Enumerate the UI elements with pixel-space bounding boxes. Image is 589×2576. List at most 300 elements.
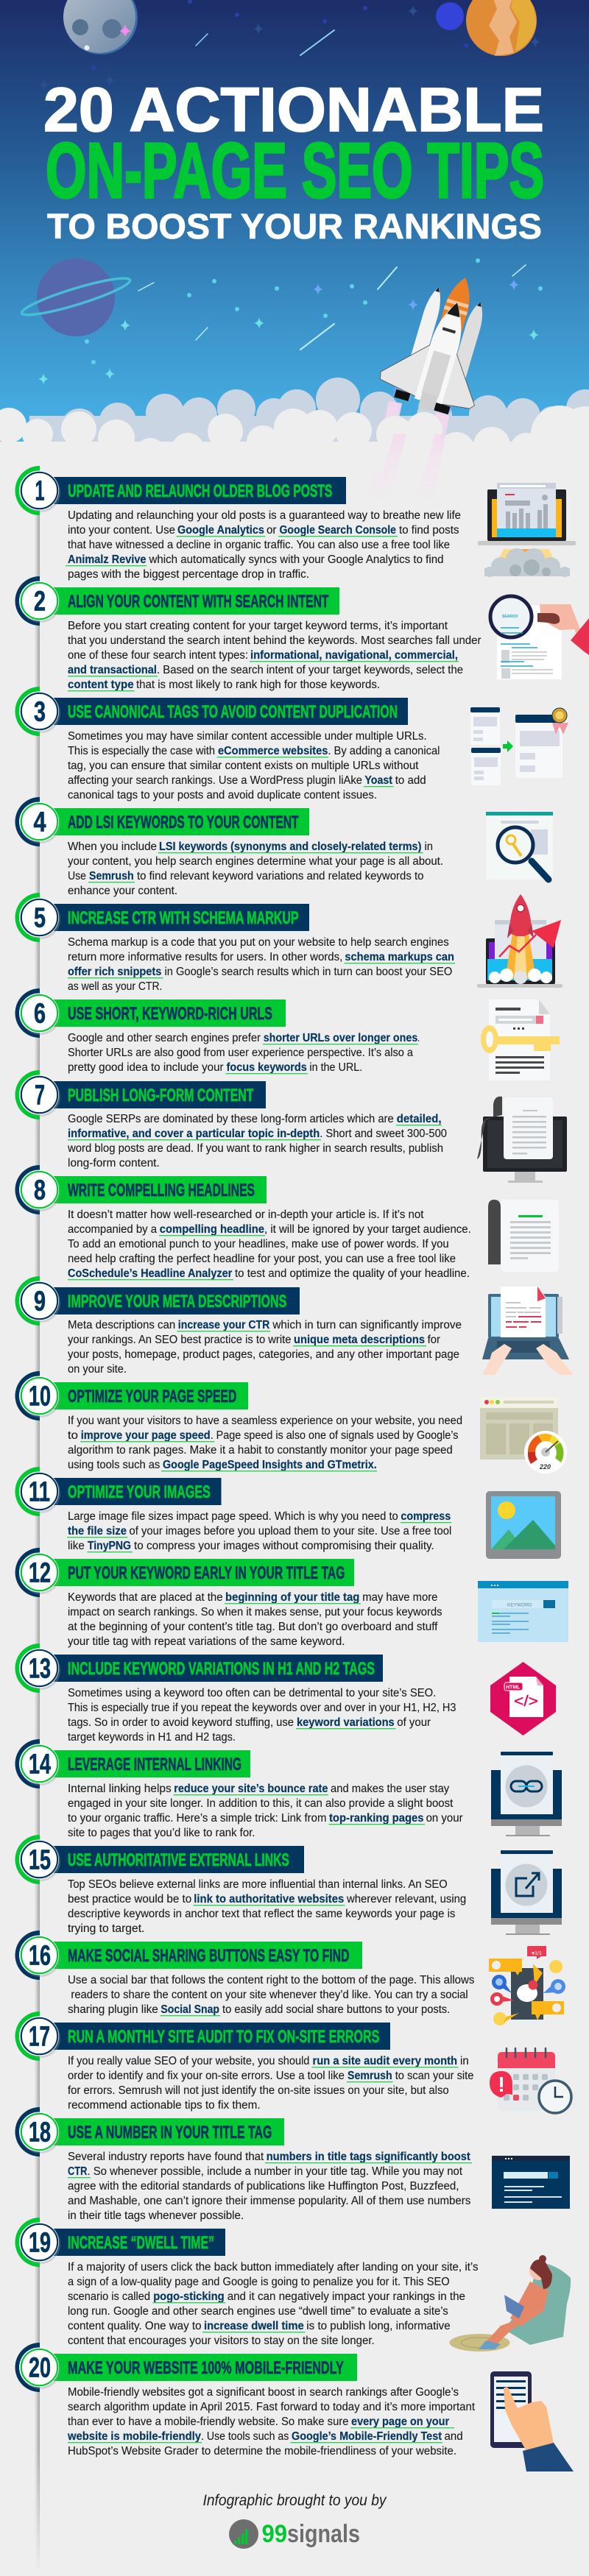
tip 20 (15, 2343, 574, 2471)
body text 10: . Page speed is also one of signals used by Google’s (211, 1429, 459, 1442)
icon: social phone with bubbles (489, 1946, 565, 2026)
body text 18: numbers in title tags significantly boost (267, 2151, 470, 2163)
body text 10: Google PageSpeed Insights and GTmetrix. (163, 1459, 377, 1471)
body text 14: Internal linking helps (68, 1783, 172, 1795)
body text 1: that have witnessed a decline in organic traffic. You can also use a free tool like (68, 539, 450, 551)
body text 12 (68, 1591, 442, 1648)
heading bar 13 (52, 1655, 383, 1682)
body text 3: This is especially the case with (68, 745, 215, 757)
body text 18 (68, 2151, 472, 2222)
body text 18: and Mashable, one can’t ignore their immense popularity. All of them use numbers (68, 2195, 471, 2207)
body text 15: link to authoritative websites (194, 1893, 344, 1906)
body text 2: . Based on the search intent of your target keywords, select the (157, 664, 463, 676)
heading bar 19 (52, 2229, 225, 2256)
body text 16: readers to share the content on your site whenever they’d like. You can try a social (71, 1989, 468, 2001)
body text 10: to (68, 1429, 78, 1442)
body text 20: than ever to have a mobile-friendly website. So make sure (68, 2416, 349, 2428)
body text 13: Sometimes using a keyword too often can be detrimental to your site’s SEO. (68, 1687, 436, 1699)
body text 1: into your content. Use (68, 524, 175, 537)
heading bar 9: IMPROVE YOUR META DESCRIPTIONS (68, 1292, 286, 1312)
body text 9: your posts, homepage, product pages, categories, and any other important page (68, 1348, 459, 1361)
number badge 2 (15, 576, 60, 626)
body text 16: Use a social bar that follows the content right to the bottom of the page. This allows (68, 1974, 475, 1986)
icon: HTML file hexagon: </> (514, 1694, 538, 1710)
body text 3: to add (395, 774, 426, 787)
body text 10 (68, 1415, 462, 1471)
body text 3: Yoast (364, 774, 392, 787)
body text 14 (68, 1783, 463, 1839)
body text 12: Keywords that are placed at the (68, 1591, 223, 1604)
body text 11: of your images before you upload them to your site. Use a free tool (130, 1525, 451, 1538)
body text 2: and transactional (68, 664, 157, 676)
heading bar 17: RUN A MONTHLY SITE AUDIT TO FIX ON-SITE ERRORS (68, 2027, 379, 2047)
title: TO BOOST YOUR RANKINGS (47, 208, 542, 247)
body text 2 (68, 620, 482, 691)
icon: browser with speedometer (480, 1397, 567, 1473)
icon: magnifier over key (486, 812, 553, 880)
body text 7: . Short and sweet 300-500 (320, 1128, 447, 1140)
heading bar 9 (52, 1287, 300, 1314)
body text 8: to test and optimize the quality of your headline. (235, 1267, 470, 1280)
body text 4: in (424, 841, 433, 853)
tip 5 (15, 893, 562, 993)
number badge 1 (15, 466, 60, 515)
body text 20: search algorithm update in April 2015. Fast forward to today and it’s more important (68, 2401, 476, 2413)
body text 17: order to identify and fix your on-site errors. Use a tool like (68, 2070, 345, 2082)
heading bar 18 (52, 2118, 284, 2145)
sparkles (38, 5, 540, 385)
icon: key over document (481, 999, 560, 1080)
number badge 1: 1 (35, 475, 44, 506)
credit line: Infographic brought to you by (203, 2492, 387, 2509)
body text 2: one of these four search intent types: (68, 649, 248, 662)
number badge 18: 18 (29, 2117, 51, 2148)
rocket (374, 262, 508, 422)
body text 7 (67, 1113, 447, 1170)
number badge 5 (15, 893, 60, 942)
body text 19: content quality. One way to (68, 2320, 202, 2332)
body text 14: top-ranking pages (329, 1812, 424, 1825)
body text 9: for (428, 1334, 440, 1346)
body text 14: to your organic traffic. Here’s a simple trick: Link from (68, 1812, 326, 1825)
icon: HTML file hexagon: HTML (506, 1685, 521, 1690)
body text 2: content type (68, 679, 134, 691)
body text 20: website is mobile-friendly (67, 2430, 201, 2443)
body text 7: Google SERPs are dominated by these long-form articles which are (68, 1113, 394, 1125)
body text 18: . So whenever possible, include a number in your title tag. While you may not (87, 2165, 463, 2178)
number badge 12: 12 (29, 1557, 51, 1588)
body text 5: return more informative results for users. In other words, (68, 951, 342, 963)
heading bar 2: ALIGN YOUR CONTENT WITH SEARCH INTENT (68, 592, 329, 612)
number badge 14 (15, 1739, 60, 1788)
clouds: back layer (26, 378, 589, 453)
number badge 9: 9 (34, 1287, 46, 1317)
number badge 10 (15, 1371, 60, 1420)
tip 1 (15, 466, 576, 581)
heading bar 5 (52, 904, 309, 931)
icon: duplicate pages and canonical page (470, 707, 568, 785)
body text 1 (66, 509, 461, 581)
number badge 19: 19 (29, 2227, 51, 2258)
shooting stars (138, 30, 526, 350)
body text 8: , it will be ignored by your target audience. (264, 1223, 471, 1236)
body text 1: pages with the biggest percentage drop in traffic. (68, 568, 309, 581)
body text 4 (68, 841, 443, 897)
body text 18: Several industry reports have found that (68, 2151, 264, 2163)
body text 15: trying to target. (68, 1922, 144, 1935)
body text 7: word blog posts are dead. If you want to rank higher in search results, publish (67, 1142, 443, 1155)
body text 2: that is most likely to rank high for those keywords. (136, 679, 380, 691)
tip 7 (15, 1070, 567, 1183)
heading bar 6: USE SHORT, KEYWORD-RICH URLS (68, 1004, 272, 1024)
number badge 8 (15, 1165, 60, 1214)
icon: search results window: KEYWORD (507, 1603, 532, 1607)
heading bar 2 (52, 587, 339, 615)
body text 7: long-form content. (68, 1157, 160, 1170)
heading bar 5: INCREASE CTR WITH SCHEMA MARKUP (68, 908, 299, 928)
body text 17: recommend actionable tips to fix them. (68, 2099, 261, 2112)
body text 11 (67, 1510, 451, 1552)
body text 18: agree with the editorial standards of publications like Huffington Post, Buzzfeed, (68, 2180, 459, 2193)
icon: calendar and clock (490, 2048, 571, 2113)
heading bar 20 (52, 2354, 357, 2381)
body text 8: CoSchedule’s Headline Analyzer (68, 1267, 232, 1280)
body text 12: beginning of your title tag (225, 1591, 359, 1604)
tip 18 (15, 2107, 570, 2222)
number badge 7: 7 (35, 1080, 45, 1111)
body text 19: pogo-sticking (153, 2290, 225, 2303)
icon: social phone with bubbles: ♥1/1 (532, 1951, 542, 1956)
body text 1: Google Search Console (280, 524, 396, 537)
logo: 99signals (229, 2519, 360, 2549)
body text 16: sharing plugin like (68, 2003, 158, 2016)
heading bar 11 (52, 1478, 221, 1505)
body text 2: that you understand the search intent behind the keywords. Most searches fall under (68, 634, 482, 647)
body text 3 (68, 730, 440, 802)
heading bar 10: OPTIMIZE YOUR PAGE SPEED (68, 1387, 236, 1406)
number badge 14: 14 (29, 1749, 51, 1780)
body text 9: Meta descriptions can (68, 1319, 175, 1331)
hero: space scene (0, 0, 589, 500)
number badge 3 (15, 687, 60, 736)
number badge 17 (15, 2011, 60, 2061)
body text 10: If you want your visitors to have a seamless experience on your website, you need (68, 1415, 462, 1427)
body text 4: When you include (68, 841, 157, 853)
icon: magnifier over search page: SEARCH (502, 615, 518, 619)
body text 19: If a majority of users click the back button immediately after landing on your site, it’s (68, 2261, 479, 2274)
heading bar 1 (52, 477, 346, 504)
body text 4: enhance your content. (68, 885, 177, 897)
body text 10: improve your page speed (81, 1429, 211, 1442)
tip 15 (15, 1835, 562, 1935)
title: 20 ACTIONABLE (43, 75, 544, 144)
body text 5 (68, 936, 455, 993)
icon: hands typing on laptop (482, 1287, 574, 1375)
number badge 15: 15 (29, 1844, 51, 1875)
body text 19: long run. Google and other search engines use “dwell time” to evaluate a site’s (68, 2305, 448, 2318)
number badge 16: 16 (29, 1940, 51, 1971)
number badge 15 (15, 1835, 60, 1884)
body text 9 (68, 1319, 462, 1376)
heading bar 4: ADD LSI KEYWORDS TO YOUR CONTENT (68, 813, 299, 832)
planet: ringed purple (19, 258, 133, 336)
body text 4: LSI keywords (synonyms and closely-related terms) (159, 841, 421, 853)
number badge 20 (15, 2343, 60, 2392)
body text 13: tags. So in order to avoid keyword stuffing, use (68, 1716, 294, 1729)
footer credit (203, 2492, 387, 2549)
heading bar 7 (52, 1081, 266, 1108)
body text 5: in Google’s search results which in turn can boost your SEO (165, 966, 452, 978)
tip 2 (15, 576, 589, 691)
icon: headline document (488, 1200, 559, 1272)
body text 14: reduce your site’s bounce rate (174, 1783, 328, 1795)
logo: 99signals: 99 (262, 2520, 287, 2548)
clouds: front layer (0, 406, 589, 471)
body text 19: is to publish long, informative (306, 2320, 451, 2332)
body text 14: site to pages that you’d like to rank for. (68, 1827, 255, 1839)
number badge 4 (15, 797, 60, 846)
body text 3: Sometimes you may have similar content accessible under multiple URLs. (68, 730, 427, 743)
body text 6: shorter URLs over longer ones (264, 1032, 417, 1044)
heading bar 13: INCLUDE KEYWORD VARIATIONS IN H1 AND H2 TAGS (68, 1659, 375, 1679)
body text 6: in the URL. (309, 1061, 362, 1074)
heading bar 20: MAKE YOUR WEBSITE 100% MOBILE-FRIENDLY (68, 2358, 344, 2378)
body text 19: scenario is called (68, 2290, 150, 2303)
number badge 5: 5 (34, 902, 46, 933)
tip 8 (15, 1165, 559, 1280)
body text 6 (68, 1032, 420, 1074)
body text 5: offer rich snippets (68, 966, 161, 978)
body text 11: TinyPNG (88, 1540, 131, 1552)
number badge 20: 20 (29, 2352, 51, 2383)
body text 1: Google Analytics (177, 524, 264, 537)
body text 2: informational, navigational, commercial, (250, 649, 458, 662)
number badge 6: 6 (34, 998, 46, 1029)
body text 15: wherever relevant, using (346, 1893, 466, 1906)
number badge 11 (15, 1467, 60, 1516)
icon: image thumbnail (486, 1491, 561, 1559)
tip 10 (15, 1371, 567, 1473)
body text 8: It doesn’t matter how well-researched or in-depth your article is. If it’s not (68, 1209, 424, 1221)
body text 6: Google and other search engines prefer (68, 1032, 261, 1044)
icon: search results window (478, 1581, 568, 1642)
heading bar 7: PUBLISH LONG-FORM CONTENT (68, 1086, 253, 1105)
body text 8: compelling headline (160, 1223, 264, 1236)
planet: blue (436, 2, 464, 30)
icon: rocket launching from laptop (477, 894, 562, 988)
body text 17: Semrush (348, 2070, 392, 2082)
body text 5: schema markups can (345, 951, 454, 963)
number badge 7 (15, 1070, 60, 1119)
body text 10: using tools such as (68, 1459, 161, 1471)
icon: magnifier over search page (490, 596, 589, 679)
body text 14: engaged in your site longer. In addition to this, it can also provide a slight boost (68, 1797, 454, 1810)
number badge 13 (15, 1643, 60, 1693)
number badge 2: 2 (34, 586, 46, 617)
body text 12: your title tag with repeat variations of the same keyword. (68, 1635, 345, 1648)
heading bar 8 (52, 1176, 267, 1203)
body text 7: informative, and cover a particular topic in-depth (68, 1128, 320, 1140)
icon: laptop with analytics (478, 483, 576, 577)
timeline rail (29, 508, 41, 2576)
title (43, 75, 544, 247)
star dots (91, 0, 468, 70)
body text 11: compress (401, 1510, 451, 1523)
number badge 18 (15, 2107, 60, 2156)
heading bar 12 (52, 1559, 354, 1586)
body text 3: affecting your search rankings. Use a WordPress plugin liAke (68, 774, 362, 787)
body text 20: and (445, 2430, 463, 2443)
body text 20: Mobile-friendly websites got a significant boost in search rankings after Google’s (68, 2386, 459, 2399)
body text 19: a sign of a low-quality page and Google is going to penalize you for it. This SEO (68, 2276, 450, 2288)
heading bar 1: UPDATE AND RELAUNCH OLDER BLOG POSTS (68, 481, 332, 501)
body text 13: This is especially true if you repeat the keywords over and over in your H1, H2, H3 (68, 1702, 456, 1714)
heading bar 6 (52, 999, 286, 1027)
body text 1: or (267, 524, 277, 537)
icon: woman reading on armchair (449, 2255, 571, 2352)
number badge 3: 3 (34, 696, 46, 727)
icon: external link on monitor (491, 1850, 562, 1935)
number badge 17: 17 (29, 2021, 50, 2052)
icon: browser with speedometer: 220 (539, 1463, 551, 1471)
body text 4: Use (68, 870, 86, 882)
tip 4 (15, 797, 553, 897)
number badge 19 (15, 2218, 60, 2267)
body text 14: and makes the user stay (331, 1783, 449, 1795)
body text 16: to easily add social share buttons to your posts. (222, 2003, 450, 2016)
body text 8: To add an emotional punch to your headlines, make use of power words. If you (68, 1238, 449, 1250)
body text 1: Updating and relaunching your old posts is a guaranteed way to breathe new life (68, 509, 461, 522)
body text 11: Large image file sizes impact page speed. Which is why you need to (68, 1510, 398, 1523)
body text 7: detailed, (397, 1113, 442, 1125)
rocket flames over clouds (374, 434, 446, 500)
heading bar 3: USE CANONICAL TAGS TO AVOID CONTENT DUPLICATION (68, 702, 398, 722)
body text 20 (67, 2386, 476, 2458)
number badge 16 (15, 1931, 60, 1980)
number badge 10: 10 (29, 1381, 51, 1412)
heading bar 3 (52, 698, 408, 725)
body text 18: CTR (68, 2165, 87, 2178)
body text 4: to find relevant keyword variations and related keywords to (137, 870, 424, 882)
heading bar 15: USE AUTHORITATIVE EXTERNAL LINKS (68, 1850, 289, 1870)
body text 9: which in turn can significantly improve (272, 1319, 462, 1331)
body text 15: descriptive keywords in anchor text that reflect the same keywords your page is (68, 1908, 456, 1920)
body text 17: run a site audit every month (312, 2055, 457, 2067)
body text 9: your rankings. An SEO best practice is to write (68, 1334, 291, 1346)
number badge 4: 4 (34, 807, 46, 838)
body text 17 (68, 2055, 473, 2112)
tip 19 (15, 2218, 571, 2352)
body text 17: for errors. Semrush will not just identify the on-site issues on your site, but also (68, 2084, 449, 2097)
body text 12: may have more (362, 1591, 437, 1604)
heading bar 16: MAKE SOCIAL SHARING BUTTONS EASY TO FIND (68, 1946, 349, 1966)
heading bar 11: OPTIMIZE YOUR IMAGES (68, 1482, 211, 1502)
heading bar 17 (52, 2023, 390, 2050)
body text 19: increase dwell time (204, 2320, 304, 2332)
number badge 6 (15, 988, 60, 1038)
heading bar 8: WRITE COMPELLING HEADLINES (68, 1181, 255, 1200)
light dots (85, 258, 543, 364)
body text 5: as well as your CTR. (68, 980, 162, 993)
body text 1: which automatically syncs with your Google Analytics to find (149, 553, 443, 566)
body text 3: eCommerce websites (218, 745, 328, 757)
body text 3: tag, you can ensure that similar content exists on multiple URLs without (68, 760, 419, 772)
body text 1: Animalz Revive (68, 553, 147, 566)
body text 12: at the beginning of your content’s title tag. But don’t go overboard and stuff (68, 1621, 438, 1633)
body text 3: canonical tags to your posts and avoid duplicate content issues. (68, 789, 377, 802)
number badge 9 (15, 1276, 60, 1326)
tip 17 (15, 2011, 571, 2113)
body text 13 (68, 1687, 456, 1744)
icon: long scroll on monitor (477, 1097, 567, 1183)
tip 16 (15, 1931, 565, 2026)
body text 4: Semrush (89, 870, 134, 882)
heading bar 19: INCREASE “DWELL TIME” (68, 2233, 214, 2253)
body text 8: need help crafting the perfect headline for your post, you can use a free tool like (68, 1253, 456, 1265)
body text 11: like (68, 1540, 85, 1552)
body text 20: every page on your (351, 2416, 449, 2428)
heading bar 10 (52, 1382, 248, 1409)
tip 12 (15, 1548, 568, 1648)
rocket flames (367, 401, 449, 500)
body text 11: to compress your images without compromising their quality. (134, 1540, 434, 1552)
number badge 13: 13 (29, 1653, 51, 1684)
tip 14 (15, 1739, 562, 1839)
body text 1: to find posts (399, 524, 459, 537)
body text 15 (68, 1878, 466, 1935)
body text 19 (68, 2261, 479, 2347)
number badge 11: 11 (29, 1476, 50, 1507)
tip 13 (15, 1643, 556, 1744)
body text 19: and it can negatively impact your rankings in the (228, 2290, 465, 2303)
body text 2: Before you start creating content for your target keyword terms, it’s important (68, 620, 448, 632)
body text 14: on your (426, 1812, 463, 1825)
logo: 99signals: signals (287, 2520, 360, 2548)
body text 15: Top SEOs believe external links are more influential than internal links. An SEO (68, 1878, 448, 1891)
tip 11 (15, 1467, 561, 1559)
body text 19: content that encourages your visitors to stay on the site longer. (68, 2335, 375, 2347)
body text 13: keyword variations (297, 1716, 395, 1729)
body text 6: . (417, 1032, 420, 1044)
body text 17: If you really value SEO of your website, you should (68, 2055, 309, 2067)
body text 18: in their title tags whenever possible. (68, 2209, 244, 2222)
body text 6: Shorter URLs are also good from user experience perspective. It’s also a (68, 1047, 413, 1059)
planet: grey moon (63, 0, 138, 54)
body text 8: accompanied by a (68, 1223, 157, 1236)
body text 8 (68, 1209, 471, 1280)
body text 3: . By adding a canonical (328, 745, 440, 757)
body text 9: on your site. (68, 1363, 127, 1376)
body text 16: Social Snap (161, 2003, 219, 2016)
body text 17: in (460, 2055, 469, 2067)
body text 15: best practice would be to (68, 1893, 191, 1906)
body text 4: your content, you help search engines determine what your page is all about. (68, 855, 443, 868)
body text 20: Google’s Mobile-Friendly Test (292, 2430, 442, 2443)
heading bar 14 (52, 1750, 250, 1777)
body text 13: of your (397, 1716, 431, 1729)
body text 20: . Use tools such as (201, 2430, 289, 2443)
body text 6: pretty good idea to include your (68, 1061, 224, 1074)
number badge 12 (15, 1548, 60, 1597)
icon: link on monitor (491, 1752, 562, 1836)
tip 9 (15, 1276, 574, 1376)
body text 10: algorithm to rank pages. Make it a habit to constantly monitor your page speed (68, 1444, 453, 1457)
body text 16 (68, 1974, 475, 2016)
body text 6: focus keywords (227, 1061, 307, 1074)
body text 13: target keywords in H1 and H2 tags. (68, 1731, 236, 1744)
icon: dark search window (492, 2156, 570, 2209)
body text 20: HubSpot’s Website Grader to determine the mobile-friendliness of your website. (68, 2445, 456, 2458)
